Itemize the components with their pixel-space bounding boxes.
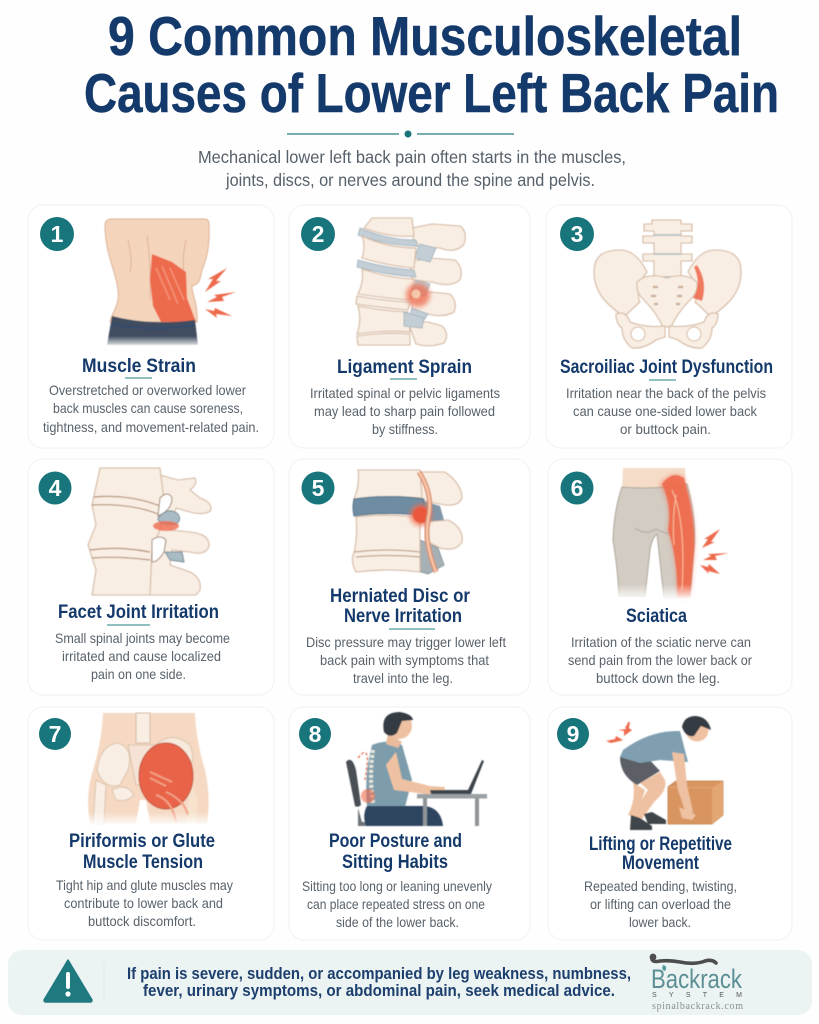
number badge 3: 3	[571, 221, 583, 247]
description: Overstretched or overworked lower	[49, 383, 246, 398]
panel: herniated disc or nerve irritation	[289, 459, 530, 695]
heading	[329, 830, 462, 873]
description	[302, 879, 492, 930]
heading: Nerve Irritation	[344, 605, 462, 627]
number badge 5: 5	[312, 475, 325, 501]
number badge 9: 9	[567, 721, 579, 747]
description: by stiffness.	[372, 422, 438, 437]
description	[55, 631, 230, 682]
number badge 7: 7	[49, 721, 61, 747]
logo: Backrack System: spinalbackrack.com	[652, 1001, 743, 1012]
description: or lifting can overload the	[590, 897, 731, 912]
number badge 9	[557, 718, 589, 750]
description: Irritation of the sciatic nerve can	[571, 635, 751, 650]
number badge 4: 4	[49, 475, 62, 501]
illustration: sciatic nerve in leg	[612, 468, 729, 600]
illustration: herniated disc	[352, 470, 462, 574]
description: travel into the leg.	[353, 671, 453, 686]
panel: ligament sprain	[289, 205, 530, 448]
description: Disc pressure may trigger lower left	[306, 635, 506, 650]
subtitle: Mechanical lower left back pain often starts in the muscles,	[198, 147, 626, 167]
description: buttock down the leg.	[596, 671, 720, 686]
panel: sciatica	[548, 459, 792, 695]
heading: Ligament Sprain	[337, 356, 472, 378]
advice text	[127, 965, 631, 1000]
description: send pain from the lower back or	[568, 653, 752, 668]
number badge 8	[299, 718, 331, 750]
description: Tight hip and glute muscles may	[56, 878, 233, 893]
logo: Backrack System: Backrack	[651, 964, 742, 994]
panel: poor posture and sitting habits	[289, 707, 530, 940]
heading: Sitting Habits	[342, 851, 448, 873]
description: buttock discomfort.	[88, 914, 196, 929]
description: may lead to sharp pain followed	[314, 404, 495, 419]
heading: Sciatica	[626, 605, 687, 627]
description	[56, 878, 233, 929]
heading: Piriformis or Glute	[69, 830, 215, 852]
heading: Facet Joint Irritation	[58, 601, 219, 623]
description: Irritation near the back of the pelvis	[566, 386, 766, 401]
description: or buttock pain.	[620, 422, 711, 437]
panel: facet joint irritation	[28, 459, 274, 695]
description	[568, 635, 752, 686]
number badge 7	[39, 718, 71, 750]
number badge 4	[38, 472, 72, 504]
number badge 6	[560, 472, 594, 504]
illustration: person sitting at laptop	[346, 712, 487, 826]
heading: Muscle Tension	[83, 851, 203, 873]
panel: muscle strain	[28, 205, 274, 448]
illustration: person lifting box	[606, 716, 723, 830]
illustration: glute muscles	[86, 713, 210, 826]
description	[566, 386, 766, 437]
heading	[330, 585, 470, 627]
number badge 2: 2	[312, 221, 324, 247]
description: lower back.	[629, 915, 691, 930]
description: can place repeated stress on one	[307, 897, 485, 912]
logo: Backrack System: SYSTEM	[652, 992, 742, 999]
heading: Muscle Strain	[82, 355, 196, 377]
heading: Sacroiliac Joint Dysfunction	[560, 356, 773, 378]
title: 9 Common Musculoskeletal	[108, 5, 742, 67]
description	[310, 386, 500, 437]
description	[306, 635, 506, 686]
description: back pain with symptoms that	[320, 653, 489, 668]
illustration: facet joint	[88, 468, 211, 595]
advice text: fever, urinary symptoms, or abdominal pain, seek medical advice.	[143, 982, 615, 1000]
panel: sacroiliac joint dysfunction	[546, 205, 792, 448]
number badge 2	[301, 217, 335, 251]
number badge 1	[40, 217, 74, 251]
logo: Backrack System	[650, 954, 743, 1012]
description: back muscles can cause soreness,	[53, 401, 243, 416]
description: tightness, and movement-related pain.	[43, 420, 259, 435]
description: pain on one side.	[91, 667, 186, 682]
icon: warning triangle	[44, 960, 92, 1002]
heading: Lifting or Repetitive	[589, 833, 732, 855]
heading	[69, 830, 215, 873]
callout: medical advice banner	[8, 950, 812, 1015]
panel: piriformis or glute muscle tension	[28, 707, 274, 940]
description	[43, 383, 259, 435]
subtitle: joints, discs, or nerves around the spine and pelvis.	[225, 170, 595, 190]
illustration: spine ligament	[356, 218, 465, 346]
description	[584, 879, 737, 930]
number badge 3	[560, 217, 594, 251]
subtitle	[198, 147, 626, 190]
advice text: If pain is severe, sudden, or accompanied by leg weakness, numbness,	[127, 965, 631, 983]
description: Sitting too long or leaning unevenly	[302, 879, 492, 894]
number badge 8: 8	[309, 721, 322, 747]
description: can cause one-sided lower back	[573, 404, 757, 419]
panel: lifting or repetitive movement	[548, 707, 792, 940]
description: Irritated spinal or pelvic ligaments	[310, 386, 500, 401]
number badge 5	[302, 472, 334, 504]
number badge 1: 1	[51, 221, 64, 247]
title	[84, 5, 779, 124]
heading: Movement	[622, 852, 699, 874]
number badge 6: 6	[571, 475, 583, 501]
description: irritated and cause localized	[62, 649, 221, 664]
heading: Poor Posture and	[329, 830, 462, 852]
title divider	[287, 130, 514, 138]
description: contribute to lower back and	[64, 896, 223, 911]
heading: Herniated Disc or	[330, 585, 470, 607]
description: Repeated bending, twisting,	[584, 879, 737, 894]
illustration: strained back muscle	[104, 219, 236, 347]
description: side of the lower back.	[336, 915, 459, 930]
illustration: pelvis	[594, 220, 741, 348]
heading	[589, 833, 732, 874]
description: Small spinal joints may become	[55, 631, 230, 646]
